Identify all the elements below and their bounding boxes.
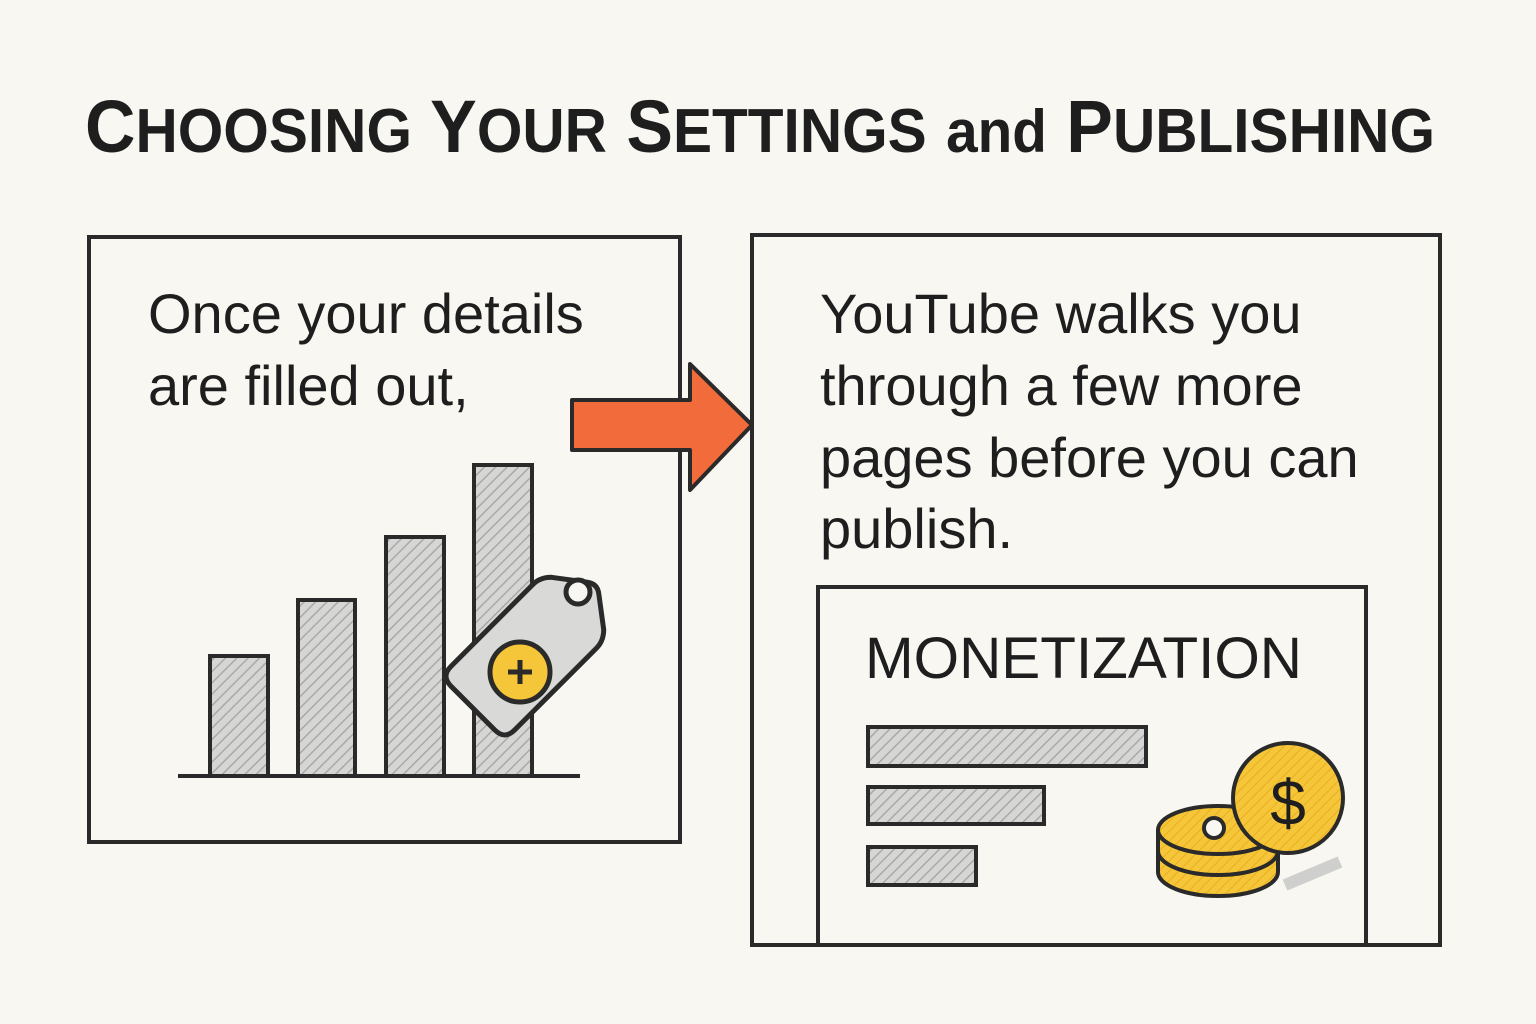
icon: coins: $ xyxy=(1270,767,1306,839)
panel: left xyxy=(89,237,680,842)
monetization heading: MONETIZATION xyxy=(865,626,1302,691)
right text: publish. xyxy=(820,497,1013,560)
icon: coins xyxy=(1158,743,1343,896)
right text: through a few more xyxy=(820,354,1302,417)
icon: price tag xyxy=(441,554,627,740)
right text: pages before you can xyxy=(820,426,1359,489)
panel: right xyxy=(752,235,1440,945)
bars xyxy=(868,727,1146,885)
left text: are filled out, xyxy=(148,354,469,417)
arrow xyxy=(572,364,752,490)
monetization box xyxy=(818,587,1366,945)
bar chart xyxy=(178,465,580,776)
left text: Once your details xyxy=(148,282,584,345)
right text: YouTube walks you xyxy=(820,282,1302,345)
title: CHOOSING YOUR SETTINGS and PUBLISHING xyxy=(85,85,1435,168)
